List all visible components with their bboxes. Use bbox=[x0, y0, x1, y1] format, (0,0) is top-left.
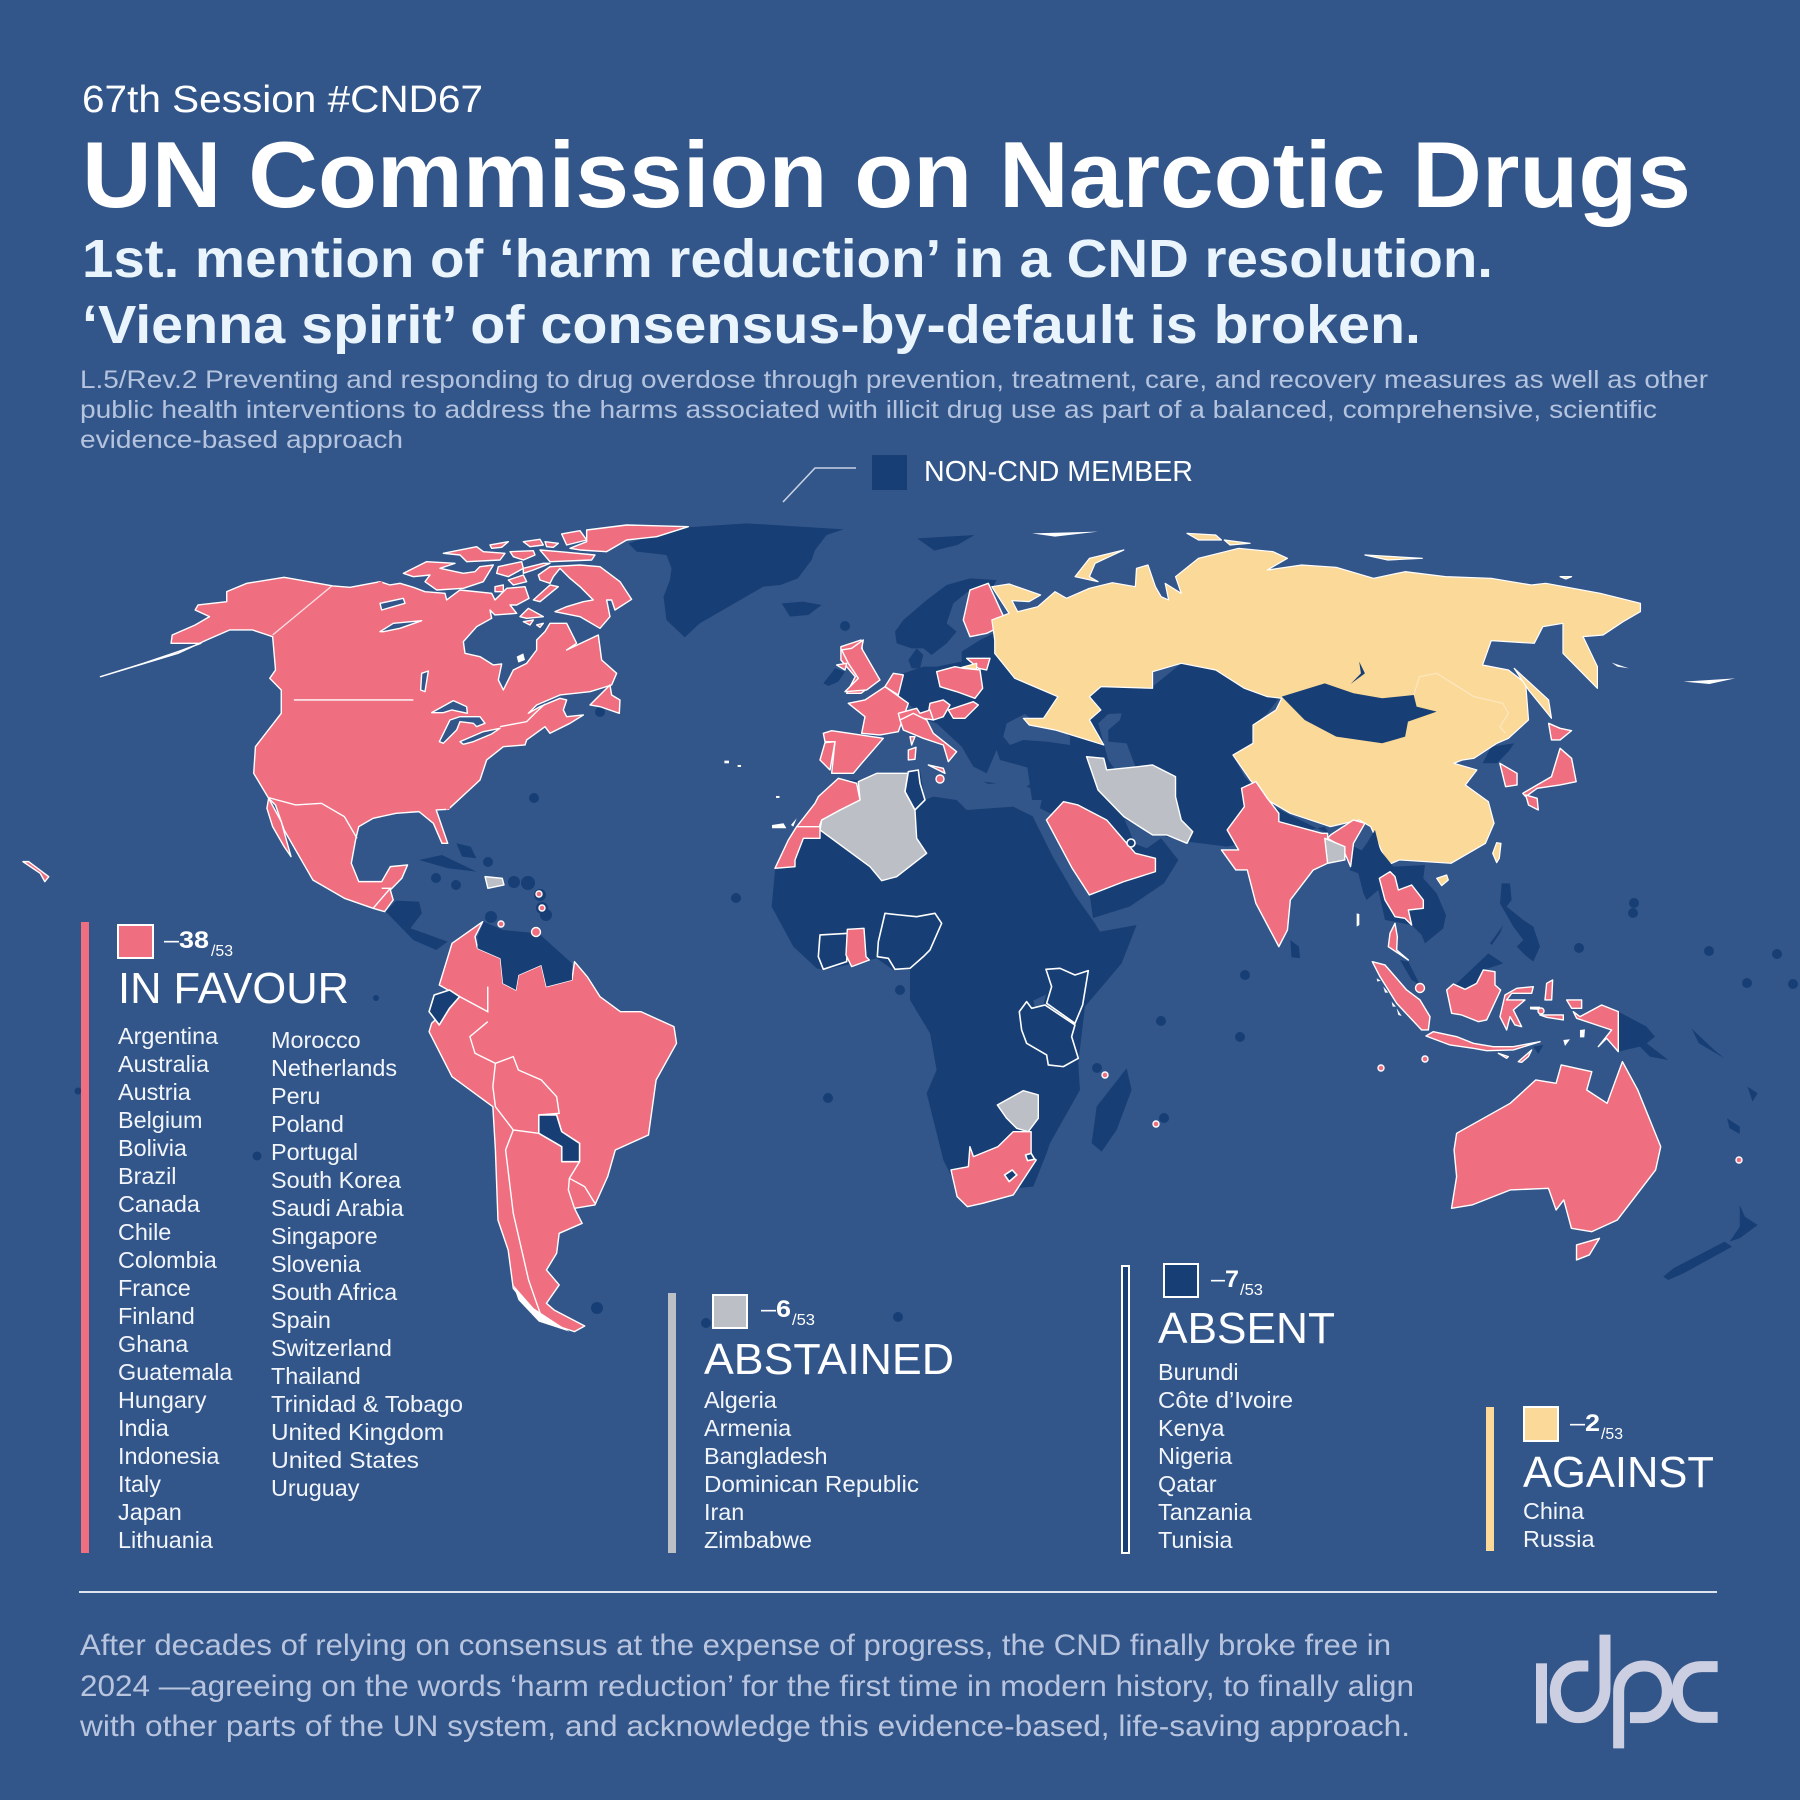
footer text: 2024 —agreeing on the words ‘harm reduction’ for the first time in modern history, to finally align bbox=[80, 1670, 1414, 1703]
panel: in favour: Ghana bbox=[118, 1331, 189, 1357]
countries: Europe bbox=[820, 583, 1007, 773]
abstained: Iran bbox=[1087, 757, 1193, 843]
panel: in favour: Peru bbox=[271, 1083, 320, 1109]
resolution description bbox=[80, 366, 1708, 454]
legend: non-CND member: NON-CND MEMBER bbox=[924, 456, 1193, 488]
panel: in favour: Lithuania bbox=[118, 1527, 214, 1553]
panel: abstained: Algeria bbox=[704, 1387, 778, 1413]
panel: abstained: Dominican Republic bbox=[704, 1471, 919, 1497]
panel: absent: Côte d’Ivoire bbox=[1158, 1387, 1293, 1413]
panel: in favour: –38 bbox=[164, 927, 209, 954]
panel: abstained: Armenia bbox=[704, 1415, 792, 1441]
panel: against: –2 bbox=[1570, 1410, 1600, 1437]
panel: in favour: IN FAVOUR bbox=[118, 964, 349, 1013]
panel: in favour: Singapore bbox=[271, 1223, 378, 1249]
panel: against: AGAINST bbox=[1523, 1448, 1714, 1497]
panel: in favour: Netherlands bbox=[271, 1055, 397, 1081]
panel: in favour: Austria bbox=[118, 1079, 192, 1105]
panel: in favour: Brazil bbox=[118, 1163, 176, 1189]
region: South-East Asia bbox=[1349, 830, 1668, 1062]
panel: in favour bbox=[81, 922, 463, 1553]
panel: in favour: Trinidad & Tobago bbox=[271, 1391, 463, 1417]
panel: in favour: India bbox=[118, 1415, 170, 1441]
landmass: Greenland, Iceland and Central America bbox=[386, 523, 844, 950]
panel: in favour: Switzerland bbox=[271, 1335, 392, 1361]
country: India bbox=[1221, 782, 1328, 947]
panel: abstained: –6 bbox=[761, 1296, 791, 1323]
panel: in favour: Belgium bbox=[118, 1107, 203, 1133]
panel: in favour: Spain bbox=[271, 1307, 331, 1333]
landmass: Africa bbox=[772, 770, 1137, 1193]
panel: absent: Tunisia bbox=[1158, 1527, 1234, 1553]
panel: absent bbox=[1122, 1264, 1335, 1553]
footer text: After decades of relying on consensus at the expense of progress, the CND finally broke free in bbox=[80, 1629, 1391, 1662]
panel: absent: Burundi bbox=[1158, 1359, 1239, 1385]
panel: against bbox=[1486, 1407, 1714, 1552]
panel: abstained: Iran bbox=[704, 1499, 744, 1525]
panel: abstained bbox=[668, 1293, 954, 1553]
country: Thailand bbox=[1379, 872, 1423, 925]
panel: in favour: United Kingdom bbox=[271, 1419, 444, 1445]
panel: in favour: Argentina bbox=[118, 1023, 219, 1049]
panel: in favour: Italy bbox=[118, 1471, 161, 1497]
panel: in favour: Saudi Arabia bbox=[271, 1195, 405, 1221]
panel: in favour: Chile bbox=[118, 1219, 171, 1245]
panel: against: Russia bbox=[1523, 1526, 1595, 1552]
panel: abstained: Bangladesh bbox=[704, 1443, 828, 1469]
panel: absent: ABSENT bbox=[1158, 1304, 1335, 1353]
panel: in favour: South Korea bbox=[271, 1167, 402, 1193]
panel: in favour: United States bbox=[271, 1447, 419, 1473]
panel: against: China bbox=[1523, 1498, 1585, 1524]
panel: in favour: Bolivia bbox=[118, 1135, 188, 1161]
countries: Asia bbox=[992, 532, 1735, 947]
panel: in favour: South Africa bbox=[271, 1279, 398, 1305]
panel: in favour: Japan bbox=[118, 1499, 182, 1525]
panel: abstained: /53 bbox=[792, 1312, 815, 1329]
panel: against: /53 bbox=[1601, 1426, 1623, 1443]
world map bbox=[23, 523, 1798, 1332]
panel: absent: –7 bbox=[1211, 1266, 1239, 1293]
panel: absent: Nigeria bbox=[1158, 1443, 1233, 1469]
footer text: with other parts of the UN system, and acknowledge this evidence-based, life-saving approach. bbox=[79, 1710, 1410, 1743]
legend: non-CND member bbox=[783, 455, 1193, 502]
panel: in favour: /53 bbox=[211, 943, 233, 960]
landmass: Asia bbox=[917, 535, 1514, 958]
islands: small non-member dots bbox=[74, 621, 1798, 1328]
panel: in favour: Canada bbox=[118, 1191, 201, 1217]
panel: in favour: Indonesia bbox=[118, 1443, 220, 1469]
panel: in favour: Thailand bbox=[271, 1363, 361, 1389]
panel: in favour: Morocco bbox=[271, 1027, 361, 1053]
panel: in favour: Poland bbox=[271, 1111, 344, 1137]
panel: in favour: Uruguay bbox=[271, 1475, 360, 1501]
headline line 2: ‘Vienna spirit’ of consensus-by-default is broken. bbox=[82, 295, 1421, 355]
panel: abstained: ABSTAINED bbox=[704, 1335, 954, 1384]
countries: Africa bbox=[775, 770, 1088, 1132]
panel: in favour: France bbox=[118, 1275, 191, 1301]
title: UN Commission on Narcotic Drugs bbox=[82, 122, 1691, 227]
resolution description: public health interventions to address the harms associated with illicit drug use as part of a balanced, comprehensive, scientific bbox=[80, 396, 1657, 424]
country: Saudi Arabia bbox=[1046, 802, 1155, 895]
subtitle: session: 67th Session #CND67 bbox=[82, 79, 483, 121]
countries: North America west, in favour bbox=[23, 577, 878, 912]
country: Australia bbox=[1452, 1062, 1661, 1260]
country: Indonesia bbox=[1357, 913, 1618, 1062]
footer text bbox=[79, 1629, 1414, 1743]
headline line 1: 1st. mention of ‘harm reduction’ in a CND resolution. bbox=[82, 229, 1493, 289]
panel: in favour: Colombia bbox=[118, 1247, 218, 1273]
against: Russia and China bbox=[992, 548, 1640, 865]
panel: absent: Qatar bbox=[1158, 1471, 1217, 1497]
landmass: Europe and Middle East bbox=[782, 578, 1133, 893]
resolution description: L.5/Rev.2 Preventing and responding to drug overdose through prevention, treatment, care, and recovery measures as well as other bbox=[80, 366, 1708, 394]
abstained: Dominican Republic bbox=[485, 877, 504, 888]
panel: in favour: Australia bbox=[118, 1051, 210, 1077]
panel: in favour: Hungary bbox=[118, 1387, 207, 1413]
seas: Black Sea, Caspian Sea and Red Sea bbox=[1003, 713, 1137, 935]
panel: absent: Kenya bbox=[1158, 1415, 1225, 1441]
panel: absent: Tanzania bbox=[1158, 1499, 1253, 1525]
islands: small voting-member dots bbox=[498, 775, 1742, 1163]
countries: South America bbox=[429, 922, 1036, 1332]
abstained: Bangladesh bbox=[1325, 838, 1345, 863]
panel: absent: /53 bbox=[1240, 1282, 1263, 1299]
country: South Africa bbox=[951, 1132, 1036, 1207]
panel: in favour: Slovenia bbox=[271, 1251, 362, 1277]
panel: in favour: Guatemala bbox=[118, 1359, 233, 1385]
logo: idpc bbox=[1536, 1635, 1718, 1748]
panel: abstained: Zimbabwe bbox=[704, 1527, 812, 1553]
panel: in favour: Portugal bbox=[271, 1139, 358, 1165]
panel: in favour: Finland bbox=[118, 1303, 195, 1329]
landmass: Pacific islands and New Zealand bbox=[1663, 1028, 1758, 1280]
resolution description: evidence-based approach bbox=[80, 426, 403, 454]
countries: north-east Canada and the Arctic bbox=[380, 525, 688, 809]
